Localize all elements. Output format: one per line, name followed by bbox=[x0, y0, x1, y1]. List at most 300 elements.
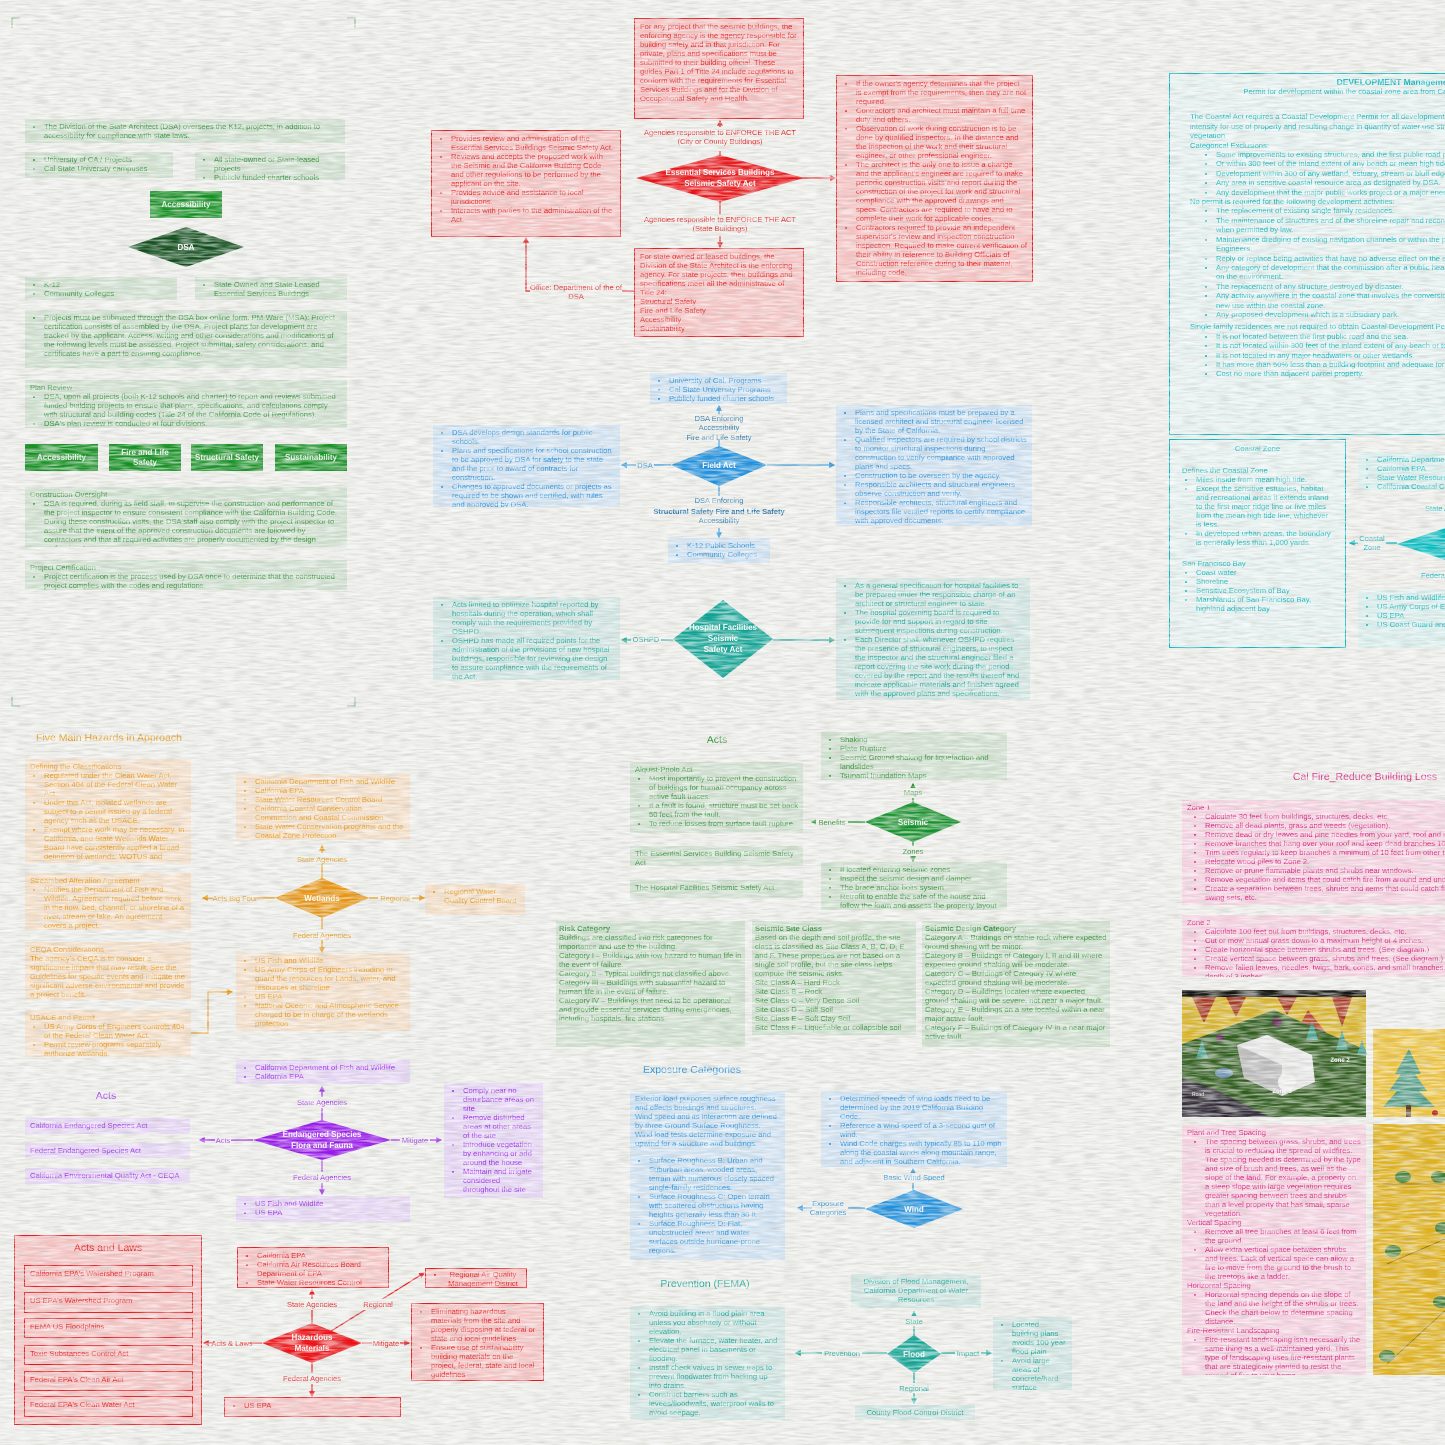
heading: prevention FEMA: Prevention (FEMA) bbox=[660, 1278, 750, 1290]
text: responsibilities: If the owner's agency determines that the project is exempt from the requirements, then they are not required. bbox=[856, 79, 1026, 106]
text: K-12 bbox=[25, 277, 177, 300]
text: mitigation: Comply near no disturbance areas on site bbox=[463, 1086, 534, 1113]
diamond: endangered species: Endangered Species bbox=[283, 1130, 362, 1139]
text: OSHPD role bbox=[433, 597, 620, 680]
text: Alquist-Priolo Act: If a fault is found, structure must be set back 50 feet from the fault. bbox=[649, 801, 798, 819]
text: Alquist-Priolo Act: Alquist-Priolo Act bbox=[635, 765, 692, 774]
diamond: essential services bbox=[636, 155, 804, 202]
text: prevention: Elevate the furnace, water heater, and electrical panel in basements or flooding. bbox=[649, 1336, 777, 1363]
text: CEQA considerations: CEQA Considerations bbox=[30, 945, 104, 954]
text: zone 2: Create vertical space between grass, shrubs and trees. (See diagram.) bbox=[1205, 954, 1443, 963]
text: state agencies bbox=[236, 774, 410, 840]
image: isometric house zones: Zone 1 bbox=[1272, 1089, 1292, 1095]
text: alteration agreement: Notifies the Department of Fish and Wildlife. Agreement required before work in the flow, bed, channel, or shoreline of a river, stream or lake. An agreement covers a project. bbox=[44, 885, 184, 930]
diamond: hospital facilities: Seismic bbox=[708, 634, 739, 643]
panel: Field Act bbox=[433, 373, 1032, 563]
connector labels bbox=[816, 788, 926, 856]
label: OSHPD: OSHPD bbox=[633, 635, 660, 644]
connector labels: Federal Agencies bbox=[293, 1173, 351, 1182]
box: development management guidelines: Development within 300 of any wetland, estuary, stream or bluff edge. bbox=[1216, 169, 1445, 178]
text: plan review: DSA's plan review is conducted at four divisions. bbox=[44, 419, 207, 428]
button: accessibility bbox=[25, 444, 98, 471]
box: development management guidelines: Categorical Exclusions: No permit is required for the following development activities: bbox=[1190, 141, 1395, 206]
text: purpose of act: Provides review and administration of the Essential Services Buildings Seismic Safety Act. bbox=[451, 134, 613, 152]
text: federal agencies: National Oceanic and Atmospheric Service charged to be in charge of the wetlands protection bbox=[255, 1001, 399, 1028]
text: mitigate bbox=[411, 1303, 544, 1381]
text: seismic site class: Seismic Site Class bbox=[755, 924, 822, 933]
connector labels: Office: Department of the of bbox=[530, 283, 623, 292]
text: Clean Water Act bbox=[25, 759, 191, 863]
text: federal agencies: US Fish and Wildlife bbox=[255, 956, 323, 965]
text: mitigation: Maintain and irrigate considered throughout the site bbox=[463, 1167, 532, 1194]
text: seismic design category: Category E – Buildings on a site located within a near major active fault. bbox=[925, 1005, 1105, 1023]
text: state-owned projects bbox=[195, 152, 345, 180]
connector labels bbox=[215, 1097, 430, 1183]
diamond: hospital facilities bbox=[673, 600, 773, 678]
text: plant and tree spacing: Allow extra vertical space between shrubs and trees. Lack of vertical space can allow a fire to move from the ground to the brush to the treetops like a ladder. bbox=[1205, 1245, 1354, 1281]
text: wind speed: Reference a wind speed of a 3-second gust of wind. bbox=[840, 1121, 995, 1139]
text: inspection requirements: Responsible architects and structural engineers observe construction and verify. bbox=[855, 480, 1015, 498]
text: OSHPD role: OSHPD has made all required points for the administration of the provisions of new hospital buildings, responsible for reviewing the design to assure compliance with the requirements of the Act. bbox=[452, 636, 609, 680]
text: zone 2: Calculate 100 feet out from buildings, structures, decks, etc. bbox=[1205, 927, 1406, 936]
flowchart: endangered species bbox=[199, 1086, 442, 1195]
text: Alquist-Priolo Act: Most importantly to prevent the construction of buildings for human occupancy across active fault traces. bbox=[649, 774, 796, 801]
connector labels: Categories bbox=[810, 1208, 846, 1217]
connector labels: (City or County Buildings) bbox=[677, 137, 763, 146]
text: universities: University of CA / Projects bbox=[44, 155, 132, 164]
text: state agencies: California Air Resources Board Department of EPA bbox=[257, 1260, 361, 1278]
text: state agencies: Cal State University Programs bbox=[669, 385, 771, 394]
connector labels: (State Buildings) bbox=[692, 224, 748, 233]
image: horizontal spacing diagram bbox=[1373, 1124, 1445, 1375]
text: K-12: K-12 bbox=[44, 280, 60, 289]
diamond: hazardous materials bbox=[262, 1323, 362, 1363]
button: structural safety bbox=[191, 444, 263, 471]
text: state buildings role: Fire and Life Safety bbox=[640, 306, 706, 315]
text: responsibilities: Observation of work during construction is to be done by qualified inspectors. In the distance and the inspection of the work and their structural engineer, or other professional engineer. bbox=[856, 124, 1019, 160]
text: seismic site class: Site Class D – Stiff Soil bbox=[755, 1005, 833, 1014]
box: coastal zone: Sensitive Ecosystem of Bay bbox=[1196, 586, 1290, 595]
diamond: wind: Wind bbox=[904, 1205, 924, 1214]
text: seismic site class: Site Class A – Hard Rock bbox=[755, 978, 840, 987]
connector labels: Regional bbox=[380, 894, 410, 903]
text: mitigation bbox=[444, 1083, 543, 1198]
text: regional bbox=[425, 1268, 527, 1288]
text: OSHPD role: Acts limited to optimize hospital reported by hospitals during the operation, which shall comply with the requirements provided by OSHPD. bbox=[452, 600, 598, 636]
text: plant and tree spacing bbox=[1182, 1125, 1366, 1375]
box: coastal zone: Marshlands of San Francisco Bay, highland adjacent bay bbox=[1196, 595, 1311, 613]
text: seismic site class bbox=[752, 921, 916, 1035]
text: impact bbox=[993, 1317, 1072, 1390]
text: state agencies: State Water Resources Control Board bbox=[255, 795, 382, 804]
text: state agencies bbox=[650, 373, 787, 404]
text: state agencies bbox=[237, 1247, 389, 1288]
text: Federal Endangered Species Act bbox=[25, 1143, 190, 1158]
item: clean water act: Federal EPA's Clean Water Act bbox=[30, 1400, 134, 1409]
text: federal bbox=[224, 1397, 401, 1417]
text: purpose of act: Provides advice and assistance to local jurisdictions. bbox=[451, 188, 584, 206]
panel: coastal environment management bbox=[254, 73, 1445, 1368]
text: plan review: DSA, upon all projects (both K-12 schools and charter) to report and reviews submitted funded building projects to ensure that plans, specifications, and calculations comply with structural and building codes (Title 24 of the California Code of Regulations). bbox=[44, 392, 336, 419]
text: state agencies: California Coastal Conservation Commission and Coastal Commission bbox=[255, 804, 383, 822]
text: federal agencies bbox=[236, 1196, 410, 1222]
box: coastal zone: Coast water bbox=[1196, 568, 1237, 577]
text: state buildings role: Structural Safety bbox=[640, 297, 696, 306]
text: DSA duties: Plans and specifications for school construction to be approved by DSA for safety to the state and the prior to award of contracts for construction. bbox=[452, 446, 612, 482]
text: responsibilities: Contractors and architect must maintain a full-time duty and others. bbox=[856, 106, 1025, 124]
box: development management guidelines: The replacement of any structure destroyed by disaster. bbox=[1216, 282, 1403, 291]
diamond: endangered species bbox=[253, 1120, 391, 1160]
text: state agencies bbox=[236, 1060, 410, 1084]
item: California EPA bbox=[24, 1265, 193, 1287]
diamond: wetlands: Wetlands bbox=[304, 894, 340, 903]
connector labels: Exposure bbox=[812, 1199, 844, 1208]
labels bbox=[1358, 504, 1445, 580]
flowchart: wetlands bbox=[191, 845, 425, 1034]
text: responsibilities: The architect is the only one to issue a change and the applicant's engineer are required to make periodic construction visits and report during the construction of the project for work and structural compliance with the approved drawings and specs. Contractors are required to have and to complete their work for applicable codes. bbox=[856, 160, 1023, 223]
connector labels: Basic Wind Speed bbox=[883, 1173, 945, 1182]
text: plant and tree spacing: Remove all tree branches at least 6 feet from the ground. bbox=[1205, 1227, 1357, 1245]
text: state agencies: California Department of Fish and Wildlife bbox=[255, 1063, 395, 1072]
text: state agencies: University of Cal. Programs bbox=[669, 376, 761, 385]
text: DSA duties: DSA develops design standards for public schools. bbox=[452, 428, 593, 446]
text: hospital act: The Hospital Facilities Seismic Safety Act bbox=[635, 883, 774, 892]
text: zone 1: Relocate wood piles to Zone 2. bbox=[1205, 857, 1309, 866]
flowchart: coastal bbox=[1349, 504, 1445, 580]
text: wind speed: Wind Code charges with typically 85 to 110 mph along the coastal winds along mountain range, and adjacent in Southern California. bbox=[840, 1139, 1002, 1166]
text: federal agencies bbox=[1358, 590, 1445, 648]
text: Clean Water Act: Defining the Classifications bbox=[30, 762, 121, 771]
button: fire and life safety bbox=[109, 444, 181, 471]
box: coastal zone bbox=[1169, 439, 1346, 648]
text: zone 2: Create horizontal space between shrubs and trees. (See diagram.) bbox=[1205, 945, 1429, 954]
labels: Zone bbox=[1363, 543, 1381, 552]
box: coastal zone: Except the sensitive estuaries, habitat and recreational areas it extends inland to the first major ridge line or five miles from the mean high tide line, whichever is less. bbox=[1196, 484, 1329, 529]
text: state buildings role: For state owned or leased buildings, the Division of the State Architect is the enforcing agency. For state projects, their buildings and specifications meet all the administrative of Title 24: bbox=[640, 252, 793, 297]
panel: flood bbox=[630, 1274, 1072, 1420]
text: state agencies: California EPA bbox=[1377, 464, 1426, 473]
flowchart: seismic bbox=[811, 783, 961, 862]
text: state agencies bbox=[851, 1274, 981, 1308]
text: zone 1: Calculate 30 feet from buildings, structures, decks, etc. bbox=[1205, 812, 1389, 821]
connector labels: Regional bbox=[363, 1300, 393, 1309]
flowchart: hospital act bbox=[621, 600, 835, 678]
text: prevention: Construct barriers such as levees/floodwalls, waterproof walls to avoid seepage. bbox=[649, 1390, 774, 1417]
connector labels: DSA Enforcing bbox=[695, 496, 743, 505]
text: federal agencies: US EPA bbox=[255, 1208, 282, 1217]
connector labels: State Agencies bbox=[297, 855, 347, 864]
connector labels: Accessibility bbox=[699, 423, 740, 432]
box: development management guidelines: Any proposed development which is a subsidiary park. bbox=[1216, 310, 1399, 319]
text: risk category: Risk Category bbox=[559, 924, 610, 933]
diamond: hospital facilities: Hospital Facilities bbox=[689, 623, 758, 632]
connector labels: DSA bbox=[568, 292, 584, 301]
box: development management guidelines: Cost no more than adjacent parcel property. bbox=[1216, 369, 1364, 378]
text: seismic site class: Site Class C – Very Dense Soil bbox=[755, 996, 859, 1005]
text: universities bbox=[25, 152, 173, 178]
text: seismic design category: Category D – Buildings located where expected ground shaking will be severe, not near a major fault. bbox=[925, 987, 1103, 1005]
connector labels: Accessibility bbox=[699, 516, 740, 525]
text: exposure categories: Wind speed and its interaction are defined by three Ground Surface Roughness. Wind load tests determine exposure and upwind for a structure and buildings. bbox=[635, 1112, 777, 1148]
connector labels: Fire and Life Safety bbox=[686, 433, 752, 442]
connector labels bbox=[212, 853, 412, 940]
connector labels bbox=[530, 127, 800, 302]
text: risk category: Category IV – Buildings that need to be operational and provide essential services during emergencies, including hospitals, fire stations. bbox=[559, 996, 732, 1023]
flowchart: hazardous materials bbox=[203, 1272, 425, 1397]
text: zone 1: Remove all dead plants, grass and weeds (vegetation). bbox=[1205, 821, 1390, 830]
panel: Hospital Facilities Seismic Safety Act bbox=[433, 578, 1030, 700]
text: DSA duties bbox=[433, 425, 620, 507]
text: zone 1 bbox=[1182, 800, 1445, 905]
text: seismic site class: Based on the depth and soil profile, the site class is classified as Site Class A, B, C, D, E and F. These properties are not based on a single soil profile, but the site class helps compute the seismic risks. bbox=[755, 933, 904, 978]
text: risk category: Category I – Buildings with low hazard to human life in the event of failure. bbox=[559, 951, 741, 969]
text: plant and tree spacing: The spacing between grass, shrubs, and trees is crucial to reducing the spread of wildfires. The spacing needed is determined by the type and size of brush and trees, as well as the slope of the land. For example, a property on a steep slope with large vegetation requires greater spacing between trees and shrubs than a level property that has small, sparse vegetation. bbox=[1205, 1137, 1361, 1218]
text: state owned buildings bbox=[195, 277, 347, 300]
text: exposure categories: Surface Roughness C: Open terrain with scattered obstructions having heights generally less than 30 ft. bbox=[649, 1192, 770, 1219]
box: acts and laws: Acts and Laws bbox=[74, 1242, 142, 1254]
text: state buildings role bbox=[634, 248, 804, 337]
text: seismic zones: Inspect the seismic design and damper bbox=[840, 874, 972, 883]
text: state agencies: Publicly funded charter schools bbox=[669, 394, 774, 403]
diamond: flood bbox=[887, 1335, 941, 1373]
connector labels bbox=[636, 414, 785, 525]
button: accessibility: Accessibility bbox=[37, 452, 86, 462]
text: federal agencies: US Army Corps of Engineers including to guard the resources for Lands, water, and resources at shoreline bbox=[255, 965, 396, 992]
connector labels bbox=[810, 1173, 945, 1218]
text: alteration agreement bbox=[25, 873, 191, 930]
diamond: DSA bbox=[128, 227, 244, 267]
text: seismic design category: Seismic Design Category bbox=[925, 924, 1016, 933]
connector labels: Impact bbox=[957, 1349, 980, 1358]
button: structural safety: Structural Safety bbox=[195, 452, 259, 462]
connector labels bbox=[211, 1299, 400, 1384]
item: US EPA: US EPA's Watershed Program bbox=[30, 1296, 132, 1305]
box: development management guidelines: It is not located between the first public road and the sea. bbox=[1216, 332, 1408, 341]
text: plant and tree spacing: Horizontal spacing depends on the slope of the land and the height of the shrubs or trees. Check the chart below to determine spacing distance. bbox=[1205, 1290, 1358, 1326]
item: clean water act bbox=[24, 1396, 193, 1417]
text: city or county agency role: For any project that the seismic buildings, the enforcing agency is the agency responsible for building safety and in that jurisdiction. For private, plans and specifications must be submitted to their building official. These guides Part 1 of Title 24 include regulations to conform with the requirements for Essential Services Buildings and for the Division of Occupational Safety and Health. bbox=[640, 22, 797, 103]
connector labels: Agencies responsible to ENFORCE THE ACT bbox=[644, 215, 796, 224]
connector labels: Mitigate bbox=[373, 1339, 399, 1348]
diamond: essential services: Essential Services Buildings bbox=[666, 168, 775, 177]
text: inspection requirements: Qualified inspectors are required by school districts to monitor structural inspections during construction to verify compliance with approved plans and specs. bbox=[855, 435, 1027, 471]
item: clean air act: Federal EPA's Clean Air Act bbox=[30, 1375, 123, 1384]
connector labels: Agencies responsible to ENFORCE THE ACT bbox=[644, 128, 796, 137]
box: development management guidelines: Any area in sensitive coastal resource area as designated by DSA. bbox=[1216, 178, 1441, 187]
flowchart: wind bbox=[797, 1168, 963, 1228]
text: state buildings role: Accessibility bbox=[640, 315, 681, 324]
text: county flood control: County Flood Control District bbox=[866, 1408, 964, 1417]
text: K-12: Community Colleges bbox=[44, 289, 114, 298]
diamond: hazardous materials: Hazardous bbox=[292, 1333, 333, 1342]
text: Federal Endangered Species Act: Federal Endangered Species Act bbox=[30, 1146, 141, 1155]
text: project certification: Project Certification bbox=[30, 563, 96, 572]
box: development management guidelines: It is not located in any major headwaters or other wetlands. bbox=[1216, 351, 1414, 360]
text: responsibilities bbox=[836, 75, 1033, 282]
text: DSA scope bbox=[25, 119, 345, 143]
item: FEMA: FEMA US Floodplains bbox=[30, 1322, 104, 1331]
image: isometric house zones: Zone 2 bbox=[1330, 1058, 1350, 1064]
text: plan review bbox=[25, 380, 347, 428]
text: project certification: Project certification is the process used by DSA once to determine that the constructed project complies with the codes and regulations. bbox=[44, 572, 335, 590]
box: coastal zone: Miles inside from mean high tide. bbox=[1196, 475, 1307, 484]
connector labels: State Agencies bbox=[297, 1098, 347, 1107]
button: fire and life safety: Safety bbox=[133, 458, 157, 466]
text: seismic zones: Retrofit to enable the safe of the house and follow the foam and assess the property layout bbox=[840, 892, 997, 910]
text: inspection requirements bbox=[836, 405, 1032, 526]
text: shaking: Shaking bbox=[840, 735, 867, 744]
text: seismic zones: If located entering seismic zones bbox=[840, 865, 950, 874]
text: state agencies: California EPA bbox=[255, 1072, 304, 1081]
item: FEMA bbox=[24, 1318, 193, 1338]
panel: DSA accessibility and project review bbox=[25, 119, 347, 590]
diamond: field act: Field Act bbox=[702, 461, 736, 470]
text: California Endangered Species Act: California Endangered Species Act bbox=[30, 1121, 147, 1130]
diamond: field act bbox=[671, 446, 767, 486]
diamond: DSA: DSA bbox=[178, 243, 195, 252]
connector labels: Acts Big Four bbox=[212, 894, 258, 903]
diamond: flood: Flood bbox=[903, 1350, 925, 1359]
connector labels: State bbox=[905, 1317, 923, 1326]
box: coastal zone: Shoreline bbox=[1196, 577, 1228, 586]
diamond: endangered species: Flora and Fauna bbox=[291, 1141, 353, 1150]
diamond: hospital facilities: Safety Act bbox=[704, 645, 743, 654]
connector labels: DSA bbox=[637, 461, 653, 470]
text: seismic design category: Category B – Buildings of Category I, II and III where expected ground shaking will be moderate. bbox=[925, 951, 1102, 969]
text: K-12: K-12 Public Schools bbox=[687, 541, 755, 550]
heading: Cal Fire: Cal Fire_Reduce Building Loss bbox=[1293, 771, 1437, 783]
text: inspection requirements: Responsible architects, structural engineers and inspectors file verified reports to certify compliance with approved documents. bbox=[855, 498, 1025, 525]
panel: stormwater bbox=[14, 1235, 544, 1425]
text: alteration agreement: Streambed Alteration Agreement bbox=[30, 876, 140, 885]
box: coastal zone: In developed urban areas, the boundary is generally less than 1,000 yards. bbox=[1196, 529, 1331, 547]
text: risk category: Category II – Typical buildings not classified above. bbox=[559, 969, 731, 978]
button: fire and life safety: Fire and Life bbox=[121, 448, 169, 456]
item: erosion act: Toxic Substances Control Act bbox=[30, 1349, 128, 1358]
item: clean air act bbox=[24, 1371, 193, 1391]
diamond: seismic bbox=[865, 802, 961, 842]
text: K-12 bbox=[668, 538, 770, 563]
box: coastal zone: Defines the Coastal Zone bbox=[1182, 466, 1268, 475]
text: zone 1: Zone 1 bbox=[1187, 803, 1211, 812]
text: shaking: Tsunami Inundation Maps bbox=[840, 771, 927, 780]
flowchart: field act bbox=[621, 405, 835, 538]
panel: seismic bbox=[556, 732, 1110, 1047]
text: federal agencies: US Fish and Wildlife bbox=[255, 1199, 323, 1208]
text: state agencies: California EPA bbox=[255, 786, 304, 795]
text: exposure categories bbox=[630, 1091, 785, 1260]
text: wind speed: Determined speeds of wind loads need to be determined by the 2019 California Building Code. bbox=[840, 1094, 990, 1121]
text: seismic site class: Site Class E – Soft Clay Soil bbox=[755, 1014, 850, 1023]
text: Clean Water Act: Regulated under the Clean Water Act, Section 404 of the Federal Clean Water Act bbox=[44, 771, 177, 798]
text: seismic site class: Site Class B – Rock bbox=[755, 987, 822, 996]
text: prevention bbox=[630, 1306, 785, 1420]
text: Clean Water Act: Under this Act, isolated wetlands are subject to a permit issued by a federal agency such as the USACE. bbox=[44, 798, 172, 825]
text: project oversight: Projects must be submitted through the DSA box online form. PM-Ware (MSA): Project certification consists of assembled by the DSA. Project plans for development are tracked by the applicant. Access, writing and other considerations and modifications of the following levels must be assessed. Project submittal, safety considerations, and certificates have a part to ensuring compliance. bbox=[44, 313, 335, 358]
box: development management guidelines: The replacement of existing single family residences. bbox=[1216, 206, 1394, 215]
button: accessibility: Accessibility bbox=[162, 200, 210, 208]
text: regional water board bbox=[425, 884, 525, 915]
connector labels: Mitigate bbox=[402, 1136, 428, 1145]
text: state agencies: Division of Flood Management, California Department of Water Resources bbox=[864, 1277, 968, 1304]
text: plant and tree spacing: Plant and Tree Spacing Vertical Spacing Horizontal Spacing Fire-Resistant Landscaping bbox=[1187, 1128, 1279, 1335]
diamond: wind bbox=[865, 1190, 963, 1228]
connector labels: Zones bbox=[903, 847, 924, 856]
panel: endangered species bbox=[25, 1060, 543, 1222]
panel: wind bbox=[630, 1064, 1007, 1260]
text: CEQA considerations: The agency's CEQA is to consider a significance impact that may result. See the Guidelines for specific events and mitigate the significant adverse environmental and provide a project benefit. bbox=[30, 954, 185, 999]
text: project certification bbox=[25, 560, 347, 590]
text: shaking bbox=[821, 732, 1007, 780]
text: federal agencies: US EPA bbox=[255, 992, 282, 1001]
text: regional: Regional Air Quality Management District bbox=[448, 1270, 518, 1288]
text: exposure categories: Surface Roughness B: Urban and Suburban areas, wooded areas, terrain with numerous closely spaced single-family residences. bbox=[649, 1156, 774, 1192]
text: Alquist-Priolo Act: To reduce losses from surface fault rupture. bbox=[649, 819, 795, 828]
text: seismic zones: The brace anchor bolts system bbox=[840, 883, 944, 892]
text: federal: US EPA bbox=[244, 1401, 271, 1410]
connector labels: Acts bbox=[216, 1136, 231, 1145]
text: responsibilities: Contractors required to provide an independent supervisor's review and inspection construction inspection. Required to make current verification of their ability in reference to Building Officials of Construction reference during to their material, including code. bbox=[856, 223, 1027, 277]
text: state-owned projects: All state-owned or State-leased projects bbox=[214, 155, 320, 173]
box: development management guidelines bbox=[1169, 73, 1445, 435]
text: hospital act bbox=[630, 880, 803, 898]
box: acts and laws bbox=[14, 1235, 202, 1425]
image: isometric house zones: Road bbox=[1192, 1092, 1204, 1098]
button: sustainability: Sustainability bbox=[285, 452, 337, 462]
item: California EPA: California EPA's Watershed Program bbox=[30, 1269, 154, 1278]
text: seismic site class: Site Class F – Liquefiable or collapsible soil bbox=[755, 1023, 901, 1032]
text: federal agencies bbox=[236, 953, 410, 1031]
text: zone 1: Remove or prune flammable plants and shrubs near windows. bbox=[1205, 866, 1414, 875]
connector labels: Benefits bbox=[818, 818, 846, 827]
text: DSA scope: The Division of the State Architect (DSA) oversees the K12, projects, in addition to accessibility for compliance with state laws. bbox=[44, 122, 320, 140]
text: shaking: Plate Rupture bbox=[840, 744, 886, 753]
diamond: wetlands bbox=[275, 878, 369, 918]
text: inspection requirements: Construction to be overseen by the agency. bbox=[855, 471, 1001, 480]
text: USACE and NWP: US Army Corps of Engineers controls 404 of the Federal Clean Water Act. bbox=[44, 1022, 185, 1040]
text: seismic design category: Category A – Buildings on stable rock where expected ground shaking will be minor. bbox=[925, 933, 1107, 951]
flowchart: flood bbox=[795, 1311, 992, 1404]
text: impact: Located building plans avoids 100 year flood plain bbox=[1012, 1320, 1066, 1356]
connector labels: Structural Safety Fire and Life Safety bbox=[653, 507, 785, 516]
text: regional water board: Regional Water Quality Control Board bbox=[444, 887, 517, 905]
text: construction oversight: Construction Oversight bbox=[30, 490, 107, 499]
panel: Essential Services Buildings Seismic Safety Act bbox=[431, 18, 1033, 337]
heading: acts: Acts bbox=[707, 734, 727, 746]
panel: Cal Fire reduce building loss bbox=[1182, 771, 1445, 1375]
box: coastal zone: Coastal Zone bbox=[1235, 444, 1280, 453]
text: zone 2 bbox=[1182, 915, 1445, 977]
text: mitigate: Ensure use of sustainability building materials on the project, federal, state and local guidelines bbox=[431, 1343, 534, 1379]
text: mitigation: Introduce vegetation by enhancing or add around the house bbox=[463, 1140, 532, 1167]
flowchart: seismic safety act bbox=[523, 120, 836, 301]
text: hospital requirements bbox=[836, 578, 1030, 700]
connector labels: Federal Agencies bbox=[293, 931, 351, 940]
text: USACE and NWP: USACE and Permit bbox=[30, 1013, 95, 1022]
labels: Coastal bbox=[1359, 534, 1385, 543]
text: California Endangered Species Act bbox=[25, 1118, 190, 1134]
text: purpose of act: Reviews and accepts the proposed work with the Seismic and the California Building Code and other regulations to be performed by the applicant on the site. bbox=[451, 152, 603, 188]
button: sustainability bbox=[275, 444, 347, 471]
diamond: seismic: Seismic bbox=[898, 818, 929, 827]
heading: approach: Five Main Hazards in Approach bbox=[36, 732, 182, 744]
text: state agencies: California Department of Fish and Wildlife bbox=[255, 777, 395, 786]
image: tree spacing bbox=[1373, 1029, 1445, 1117]
text: county flood control bbox=[855, 1405, 975, 1420]
text: risk category: Category III – Buildings with substantial hazard to human life in the event of failure. bbox=[559, 978, 725, 996]
text: seismic zones bbox=[821, 862, 1007, 910]
text: risk category bbox=[556, 921, 745, 1047]
